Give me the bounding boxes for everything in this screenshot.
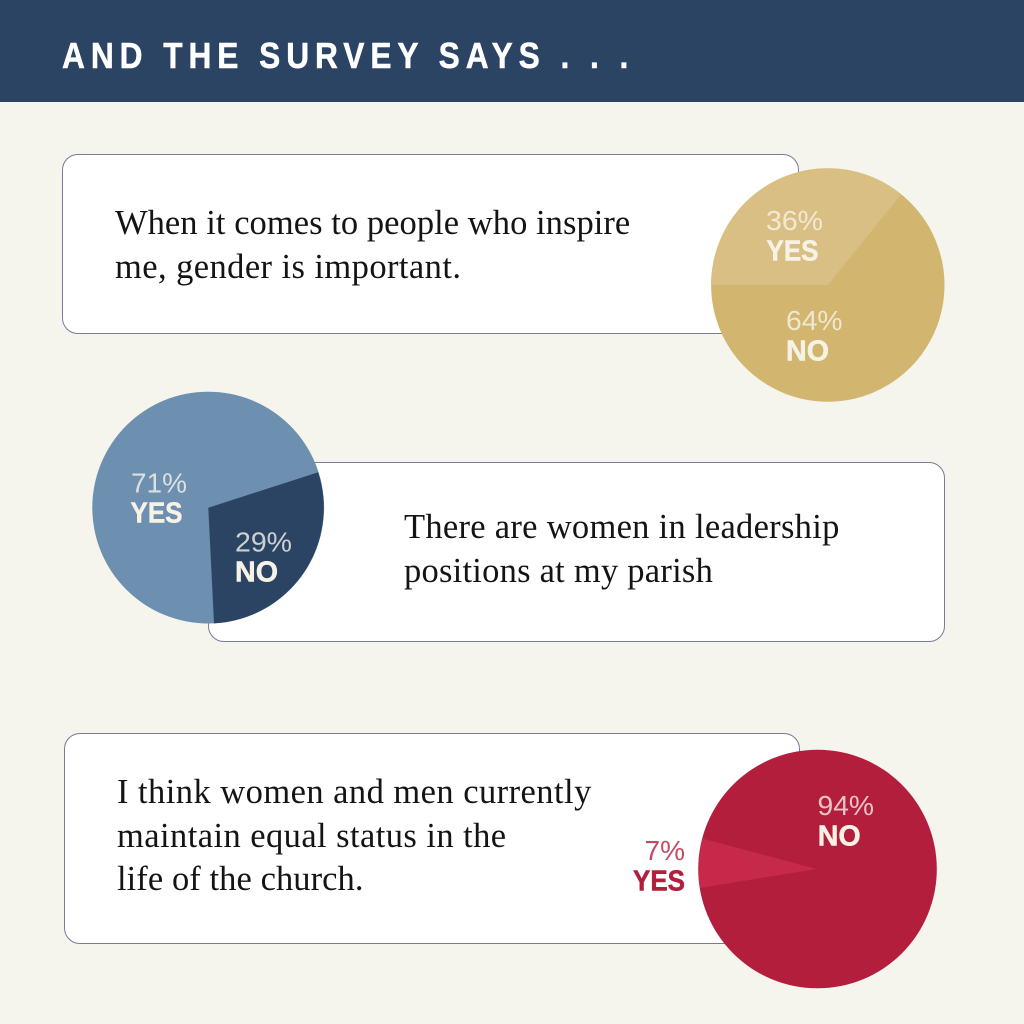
pie chart: equal status: 7% [644,835,685,866]
text: question 3: I think women and men currently [117,773,592,811]
text: question 2: There are women in leadership [404,508,840,546]
text: question 1: When it comes to people who inspire [115,204,630,242]
pie chart: gender importance: YES [766,236,818,268]
pie chart: gender importance [711,168,944,402]
text: question 2 [404,508,840,590]
pie chart: women in leadership: 29% [235,527,292,558]
panel: question 2 [208,462,945,642]
panel: question 3 [64,733,800,944]
title: AND THE SURVEY SAYS . . . [62,35,634,76]
pie chart: women in leadership: NO [235,557,278,589]
pie chart: equal status [633,750,937,988]
header banner [0,0,1024,102]
pie chart: equal status: NO [818,820,861,852]
text: question 2: positions at my parish [404,552,713,590]
pie chart: equal status: YES [633,866,685,898]
panel: question 1 [62,154,799,334]
pie chart: women in leadership: YES [130,498,182,530]
pie chart: gender importance: 64% [786,305,842,336]
pie chart: equal status: 94% [818,790,874,821]
text: question 3: life of the church. [117,860,364,898]
pie chart: women in leadership: 71% [131,467,187,498]
pie chart: gender importance: NO [786,336,829,368]
text: question 3: maintain equal status in the [117,816,507,854]
text: question 1: me, gender is important. [115,248,461,286]
pie chart: women in leadership [92,392,324,624]
pie chart: gender importance: 36% [766,205,823,236]
text: question 1 [115,204,630,286]
text: question 3 [117,773,592,898]
